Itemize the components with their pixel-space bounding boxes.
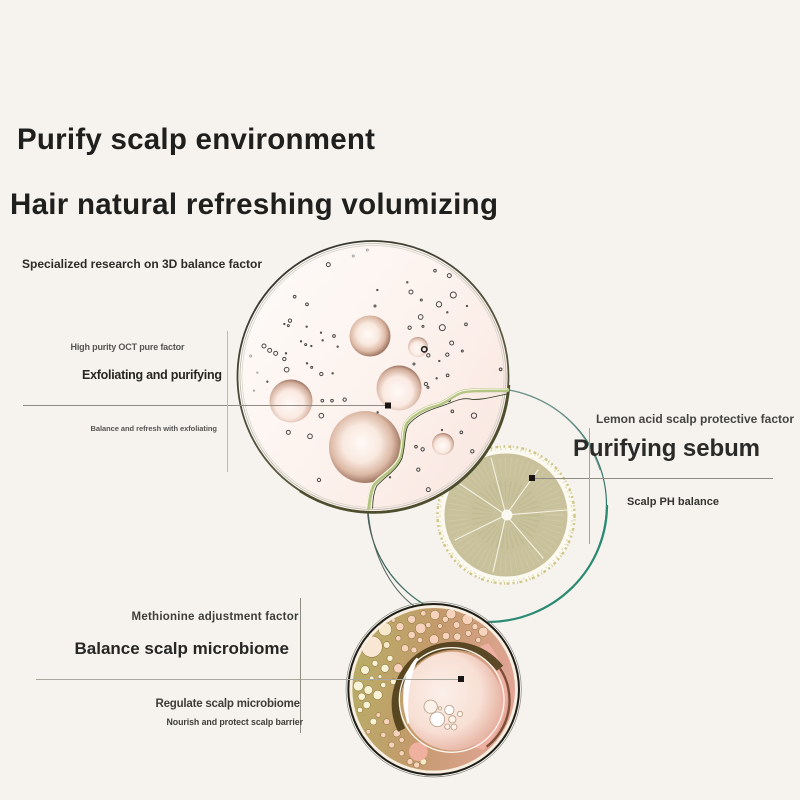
callout: methionine factor: Methionine adjustment factor [132,611,299,623]
callout: OCT pure factor [23,331,391,472]
honeycomb cells [353,609,488,768]
icon: lemon slice [437,446,575,584]
tiny droplets [250,249,502,492]
title line 1: Purify scalp environment [17,123,375,156]
callout: methionine factor: Balance scalp microbiome [74,639,289,658]
outer rims [348,604,519,775]
callout: methionine factor: Nourish and protect scalp barrier [166,717,304,727]
callout: methionine factor [36,598,464,733]
lemon dish ring [368,388,607,622]
callout: lemon acid factor: Scalp PH balance [627,496,719,508]
green oil streak [367,389,507,508]
title line 2: Hair natural refreshing volumizing [10,188,498,221]
callout: lemon acid factor: Lemon acid scalp protective factor [596,412,794,426]
callout: methionine factor: Regulate scalp microbiome [156,698,300,710]
oil droplet cluster [424,700,463,730]
subtitle: 3D balance factor: Specialized research on 3D balance factor [22,257,262,271]
pearl bubbles [270,316,454,483]
callout: OCT pure factor: Balance and refresh with exfoliating [90,424,217,433]
large oil-bubble dish [237,240,509,512]
pink corner wash [473,643,507,750]
callout: OCT pure factor: Exfoliating and purifying [82,368,222,382]
callout: lemon acid factor: Purifying sebum [573,435,760,462]
callout: OCT pure factor: High purity OCT pure factor [70,342,185,352]
callout: lemon acid factor [529,412,794,544]
inner sphere [396,646,500,730]
small honeycomb oil dish [346,602,521,777]
